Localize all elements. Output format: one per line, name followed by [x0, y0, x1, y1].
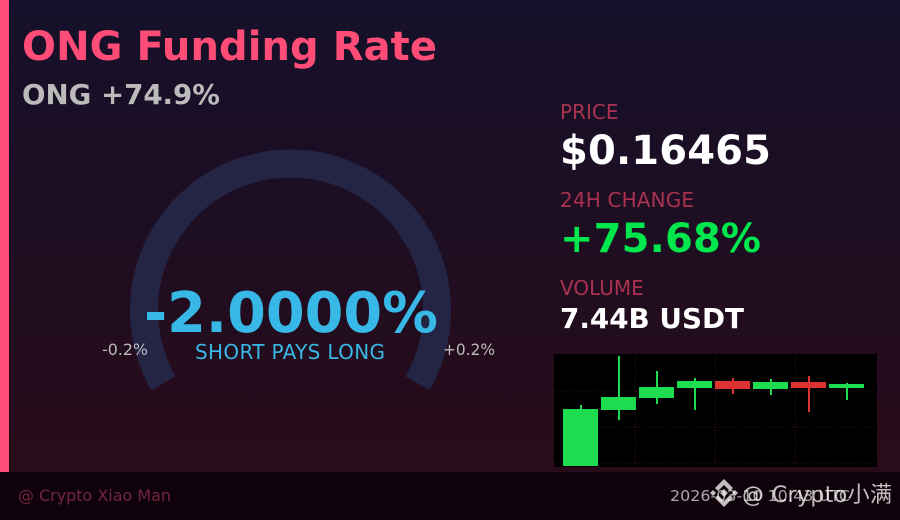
- price value: $0.16465: [560, 128, 771, 174]
- gauge max label: +0.2%: [443, 340, 495, 359]
- gauge arc: [144, 164, 437, 383]
- icon: diamond logo: [710, 479, 738, 507]
- accent bar: [0, 0, 9, 472]
- gauge min label: -0.2%: [102, 340, 148, 359]
- volume value: 7.44B USDT: [560, 302, 744, 335]
- footer bar: [0, 472, 900, 520]
- watermark text: @ Crypto小满: [742, 483, 892, 508]
- candlestick chart: [554, 354, 877, 467]
- title: ONG Funding Rate: [22, 24, 437, 70]
- gauge caption: SHORT PAYS LONG: [195, 340, 385, 364]
- footer timestamp: 2026-03-10 10:43 UTC: [670, 487, 850, 505]
- gauge: [102, 164, 495, 383]
- price label: PRICE: [560, 100, 618, 124]
- watermark: [710, 479, 892, 508]
- funding rate value: -2.0000%: [144, 281, 438, 346]
- change value: +75.68%: [560, 216, 761, 262]
- volume label: VOLUME: [560, 276, 644, 300]
- subtitle: ONG +74.9%: [22, 78, 220, 111]
- change label: 24H CHANGE: [560, 188, 694, 212]
- footer credit: @ Crypto Xiao Man: [18, 486, 171, 505]
